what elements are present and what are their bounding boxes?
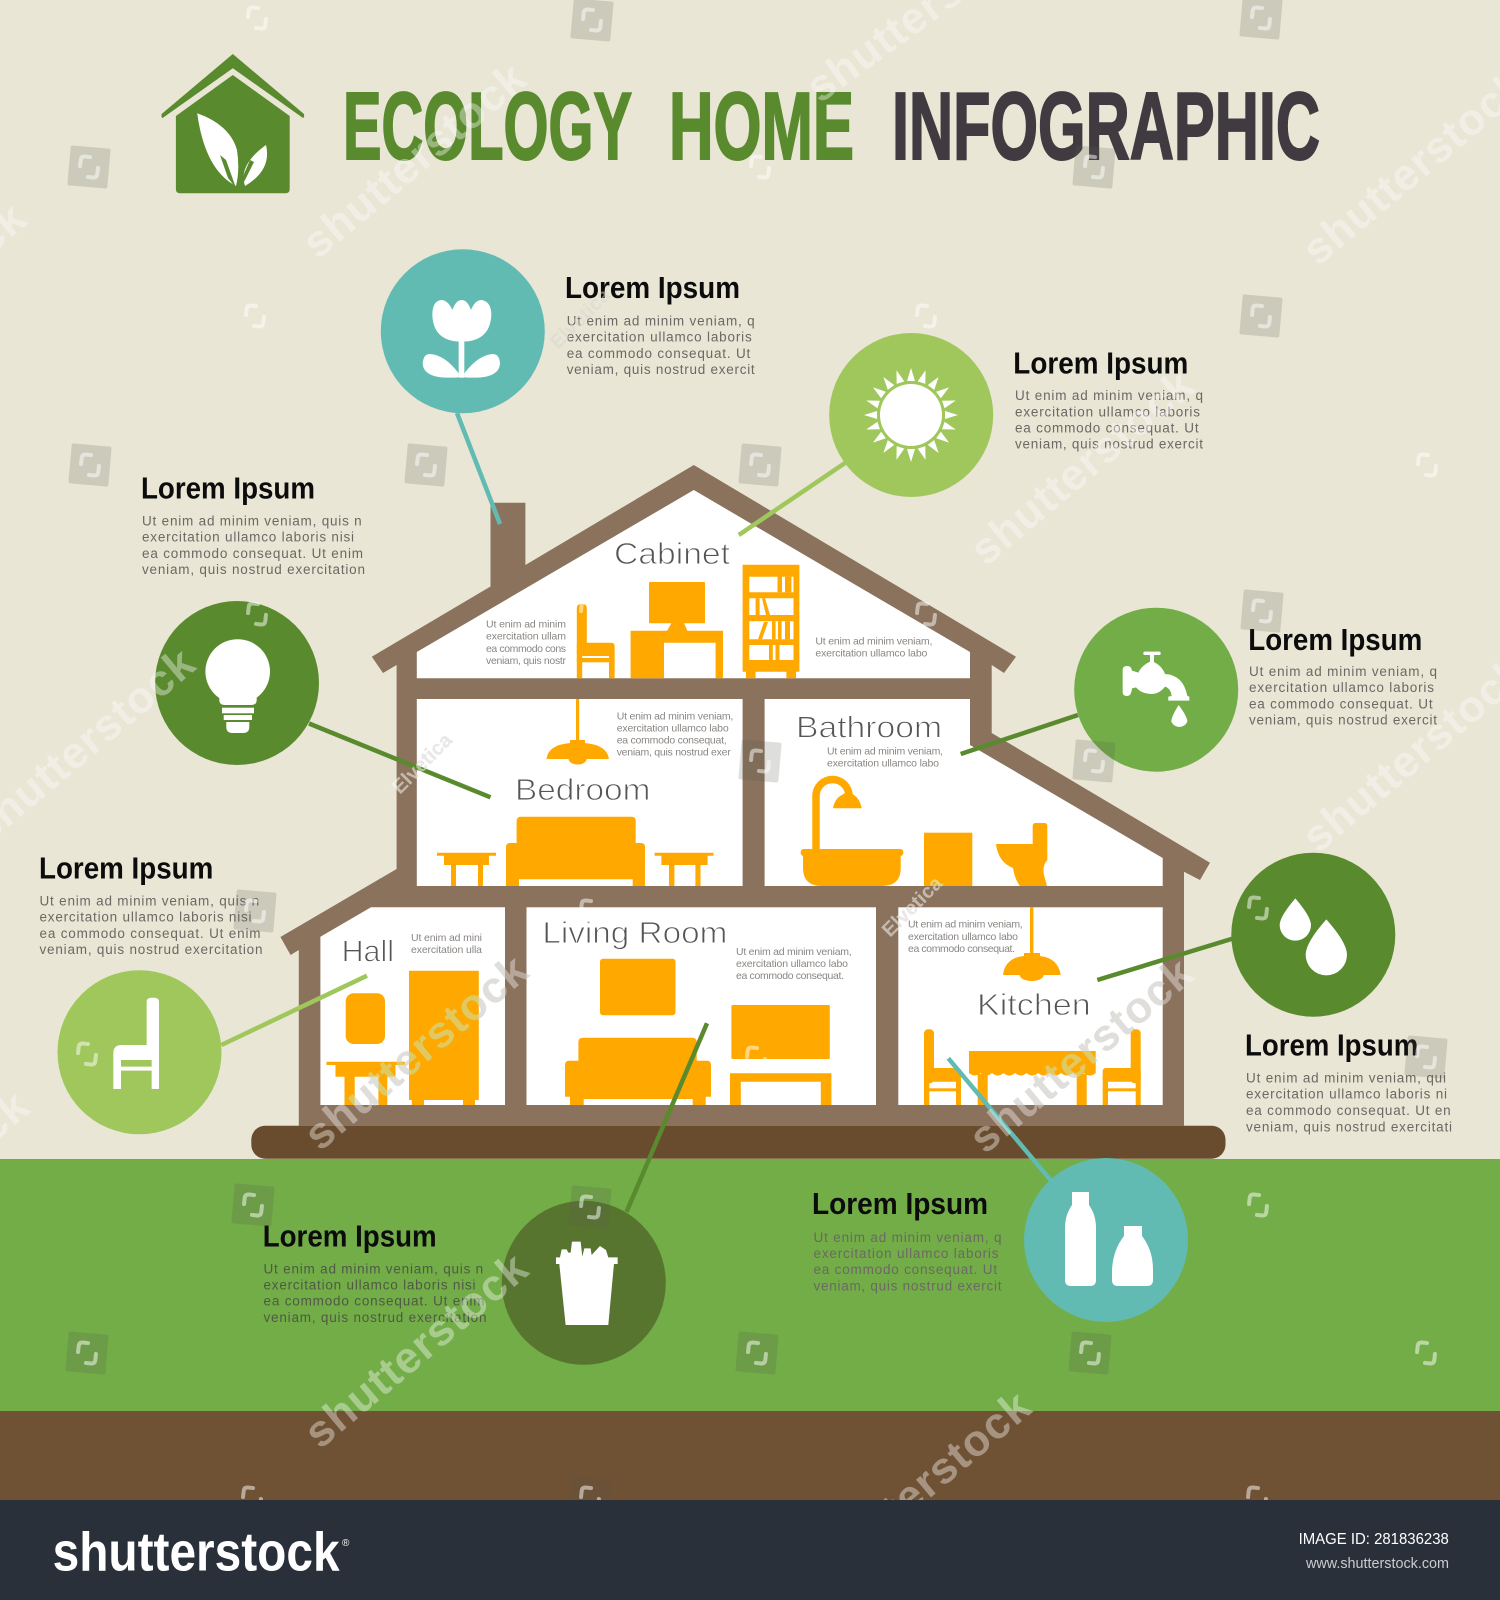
watermark overlay: Elvetica [546,284,616,354]
text: kitchen [908,919,1023,955]
label: living room: Living Room [542,915,727,950]
watermark shading over white rooms: shutterstock [295,945,537,1160]
body text: veniam, quis nostrud exercit [1015,437,1203,452]
background: lawn [0,1159,1500,1412]
text: hall [411,932,482,956]
body text: exercitation ullamco laboris [1249,680,1434,695]
house base slab [251,1126,1226,1159]
callout: flower [381,249,755,413]
furniture: wardrobe [409,971,479,1105]
connector: chair [221,976,367,1045]
body text [1249,664,1437,728]
callout: chair [39,850,262,1134]
furniture: chair [577,604,615,678]
icon: light bulb [205,639,270,733]
body text [814,1230,1002,1293]
furniture: sofa [565,1038,711,1105]
title [343,73,1320,180]
furniture: console table [326,1062,405,1105]
furniture: kitchen lamp [1003,907,1061,981]
watermark overlay: shutterstock [295,945,537,1160]
heading: Lorem Ipsum [141,470,315,505]
heading: Lorem Ipsum [1013,345,1188,380]
text: bathroom: exercitation ullamco labo [827,757,939,769]
icon: chair [113,998,159,1089]
text: living room: exercitation ullamco labo [736,958,848,970]
body text: exercitation ullamco laboris [1015,404,1200,419]
title: HOME [669,73,854,180]
furniture: dining table [969,1051,1096,1105]
body text: ea commodo consequat. Ut enim [142,546,363,561]
icon: flower [423,300,500,378]
text: hall: Ut enim ad mini [411,932,482,944]
callout: bottles [812,1158,1188,1322]
furniture: ceiling lamp [546,699,609,764]
heading: Lorem Ipsum [1248,622,1422,657]
website: www.shutterstock.com [1305,1555,1449,1572]
body text: veniam, quis nostrud exercit [814,1278,1002,1293]
watermark shading over white rooms: Elvetica [388,729,458,799]
body text: ea commodo consequat. Ut [814,1262,997,1277]
text: cabinet right: Ut enim ad minim veniam, [815,635,932,647]
watermark overlay: shutterstock [295,1243,537,1458]
footer bar [0,1500,1500,1600]
body text [1015,388,1203,452]
watermark shading over white rooms: shutterstock [960,948,1202,1163]
room: bathroom [765,699,1163,886]
text: bedroom [617,710,733,758]
text: bathroom: Ut enim ad minim veniam, [827,745,943,757]
furniture: bookshelf [743,565,799,678]
text: cabinet left: Ut enim ad minim [486,619,566,631]
background: sky [0,0,1500,1160]
watermark shading over white rooms: shutterstock [961,360,1203,575]
image id: IMAGE ID: 281836238 [1299,1531,1449,1548]
body text: Ut enim ad minim veniam, quis n [40,894,259,909]
icon: bottles [1065,1192,1153,1286]
icon: sun [864,368,958,462]
callout: sun [829,333,1203,497]
watermark shading over white rooms [341,736,1162,1105]
heading: Lorem Ipsum [812,1186,988,1221]
label: hall: Hall [342,934,394,969]
room: cabinet [417,490,970,678]
body text [1246,1071,1452,1134]
text: bedroom: exercitation ullamco labo [617,722,729,734]
body text: exercitation ullamco laboris [814,1246,999,1261]
text: living room: Ut enim ad minim veniam, [736,946,852,958]
text: bedroom: veniam, quis nostrud exer [617,746,731,758]
callout: tap [1074,608,1437,772]
body text: exercitation ullamco laboris nisi [40,910,252,925]
body text: ea commodo consequat. Ut enim [264,1294,484,1309]
body text: ea commodo consequat. Ut en [1246,1103,1451,1118]
text: cabinet right: exercitation ullamco labo [815,648,928,660]
body text [567,314,755,377]
connector: bottles [948,1058,1051,1181]
body text: veniam, quis nostrud exercit [567,362,755,377]
furniture: toilet [996,823,1047,886]
body text: veniam, quis nostrud exercit [1249,712,1437,728]
text: cabinet left [486,619,566,667]
label: bedroom: Bedroom [515,772,650,807]
body text: ea commodo consequat. Ut [1249,696,1433,711]
body text [264,1261,486,1325]
connector: tap [961,715,1078,754]
furniture: tv stand [730,1073,831,1105]
body text: Ut enim ad minim veniam, q [1015,388,1203,403]
text: cabinet left: veniam, quis nostr [486,655,566,667]
watermark overlay: shutterstock [961,360,1203,575]
text: cabinet left: exercitation ullam [486,631,566,643]
heading: Lorem Ipsum [1245,1028,1418,1063]
callout: water drops [1231,853,1452,1134]
label: cabinet: Cabinet [614,536,730,571]
body text: exercitation ullamco laboris ni [1246,1087,1447,1102]
title: ECOLOGY [343,73,632,180]
text: hall: exercitation ulla [411,944,482,956]
watermark overlay: Elvetica [878,872,948,942]
text: cabinet right [815,635,932,660]
furniture: television [731,1005,830,1059]
connector: water drops [1097,938,1233,980]
furniture: desk with monitor [631,582,723,678]
text: kitchen: ea commodo consequat. [908,943,1015,955]
body text: exercitation ullamco laboris nisi [142,530,354,545]
connector: fries [626,1023,707,1212]
body text: Ut enim ad minim veniam, q [814,1230,1002,1245]
footer logo: shutterstock [53,1521,340,1583]
body text: exercitation ullamco laboris [567,330,752,345]
text: living room: ea commodo consequat. [736,970,844,982]
furniture: left night table [437,853,496,886]
callout: light bulb [141,470,365,765]
furniture: right night table [655,853,714,886]
room: living room [526,907,876,1105]
body text: ea commodo consequat. Ut enim [40,926,260,941]
body text: veniam, quis nostrud exercitation [40,942,262,957]
text: kitchen: Ut enim ad minim veniam, [908,919,1023,931]
text: bedroom: ea commodo consequat, [617,734,727,746]
icon: fries [556,1242,618,1325]
registered mark: ® [342,1538,350,1549]
furniture: picture [600,959,676,1015]
watermark overlay: shutterstock [293,53,535,268]
watermark overlay: shutterstock [798,1381,1040,1596]
text: cabinet left: ea commodo cons [486,643,566,655]
furniture: bed [506,817,645,886]
furniture: cabinet [924,833,972,886]
furniture: mirror [346,993,385,1044]
house structure [280,465,1210,1126]
body text: Ut enim ad minim veniam, quis n [264,1261,483,1276]
logo: eco house [161,54,304,193]
heading: Lorem Ipsum [565,270,740,305]
body text: Ut enim ad minim veniam, q [567,314,755,329]
body text: Ut enim ad minim veniam, qui [1246,1071,1446,1086]
room: kitchen [898,907,1163,1105]
furniture: right kitchen chair [1103,1029,1141,1105]
connector: bulb [309,724,490,797]
callout: fries [263,1201,666,1365]
heading: Lorem Ipsum [263,1219,437,1254]
body text: veniam, quis nostrud exercitati [1246,1119,1452,1134]
watermark shading over white rooms: Elvetica [878,872,948,942]
furniture: bathtub with shower [801,780,903,886]
label: kitchen: Kitchen [977,987,1091,1022]
connector: flower [457,413,500,524]
text: kitchen: exercitation ullamco labo [908,931,1018,943]
body text: ea commodo consequat. Ut [1015,420,1199,436]
text: bedroom: Ut enim ad minim veniam, [617,710,733,722]
body text: veniam, quis nostrud exercitation [142,562,365,577]
icon: water drops [1280,898,1347,975]
body text [142,514,365,577]
body text [40,894,262,957]
body text: exercitation ullamco laboris nisi [264,1277,476,1292]
text: bathroom [827,745,943,769]
furniture: left kitchen chair [924,1029,961,1105]
connector: sun [739,463,845,535]
body text: Ut enim ad minim veniam, q [1249,664,1437,679]
text: living room [736,946,852,982]
icon: tap [1123,652,1189,727]
body text: veniam, quis nostrud exercitation [264,1310,486,1325]
room: hall [320,907,505,1105]
background: soil [0,1411,1500,1501]
room: bedroom [417,699,743,886]
heading: Lorem Ipsum [39,850,213,885]
watermark overlay: shutterstock [960,948,1202,1163]
watermark overlay: Elvetica [388,729,458,799]
label: bathroom: Bathroom [796,709,942,744]
body text: Ut enim ad minim veniam, quis n [142,514,362,529]
body text: ea commodo consequat. Ut [567,346,751,361]
